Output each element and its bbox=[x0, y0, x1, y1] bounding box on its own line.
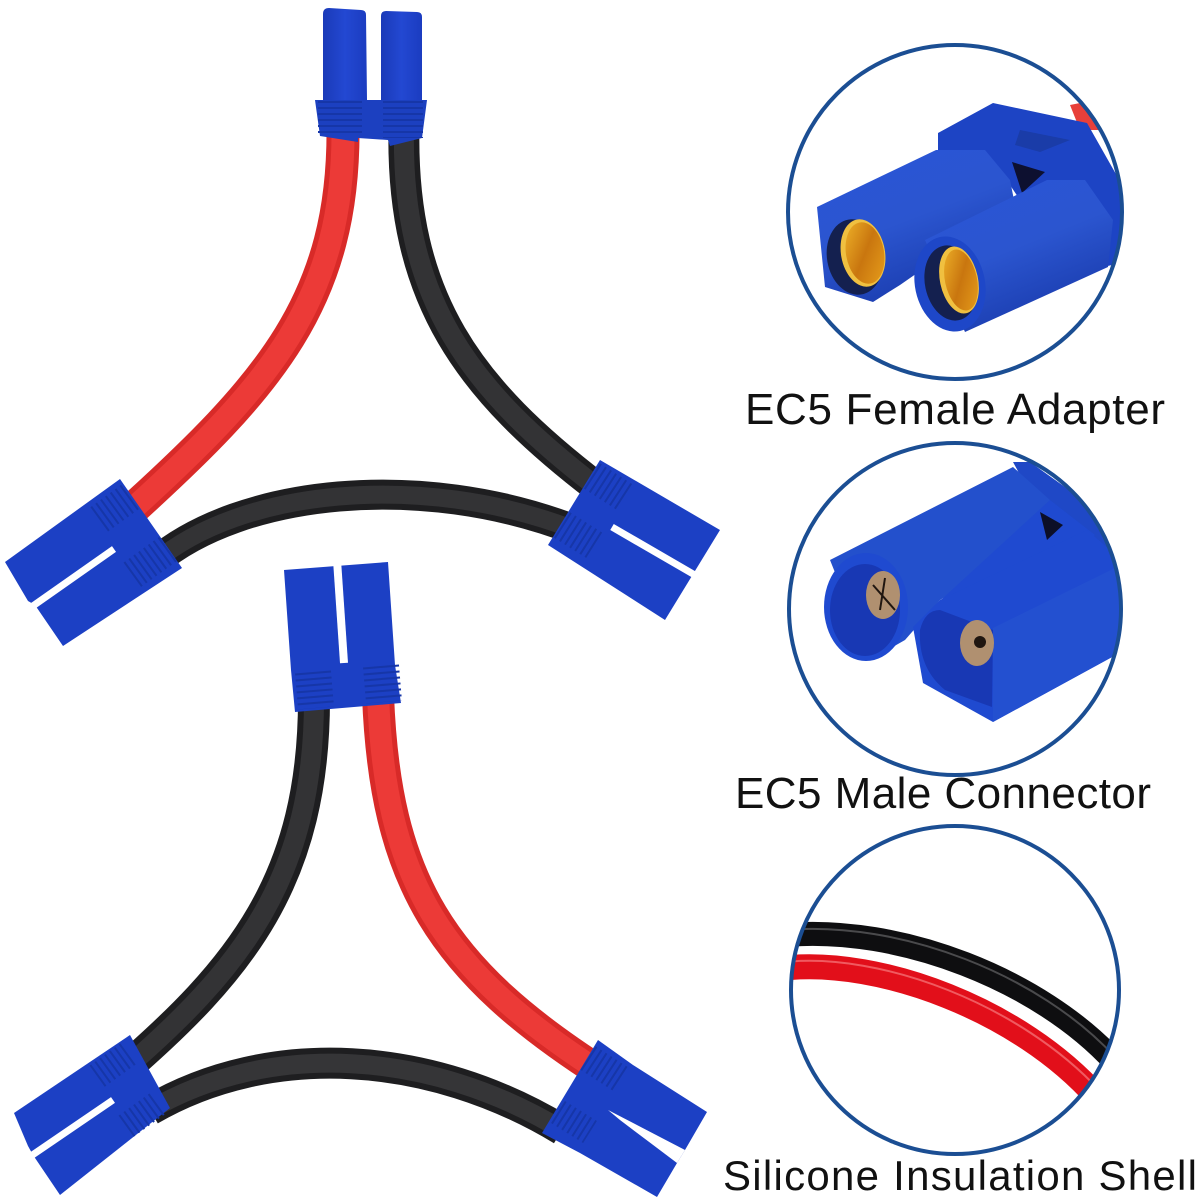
rear housing bbox=[938, 103, 1125, 270]
connector: lower right bbox=[548, 460, 720, 620]
label: EC5 Female Adapter: EC5 Female Adapter bbox=[745, 385, 1165, 434]
left tube bbox=[817, 150, 1015, 302]
product: top Y-cable bbox=[5, 8, 720, 646]
socket right bbox=[924, 245, 974, 321]
rear housing bbox=[1013, 462, 1108, 548]
callout: EC5 female adapter circle bbox=[788, 45, 1125, 379]
connector: bottom top bbox=[284, 560, 401, 712]
callout: silicone insulation shell circle bbox=[785, 826, 1119, 1154]
cable: top black wire right bbox=[404, 125, 598, 488]
red wire bbox=[785, 967, 1097, 1097]
label: Silicone Insulation Shell: Silicone Insulation Shell bbox=[723, 1152, 1197, 1199]
connector: bottom right bbox=[542, 1040, 707, 1197]
right tube bbox=[925, 180, 1113, 332]
cable: top black wire lower bbox=[155, 495, 575, 562]
cable: bottom black wire left bbox=[118, 695, 314, 1075]
connector: bottom left bbox=[14, 1035, 170, 1195]
connector: top bbox=[315, 8, 427, 146]
connector: lower left bbox=[5, 479, 182, 646]
cable: top red wire bbox=[125, 125, 343, 516]
socket left bbox=[826, 219, 880, 295]
product: bottom Y-cable bbox=[14, 560, 707, 1197]
black wire bbox=[785, 934, 1115, 1062]
cable: bottom black wire lower bbox=[150, 1063, 562, 1130]
cable: bottom red wire bbox=[378, 695, 605, 1075]
label: EC5 Male Connector: EC5 Male Connector bbox=[735, 769, 1151, 818]
right square tube bbox=[913, 530, 1125, 722]
callout: EC5 male connector circle bbox=[789, 443, 1125, 775]
left tube bbox=[830, 467, 1039, 646]
